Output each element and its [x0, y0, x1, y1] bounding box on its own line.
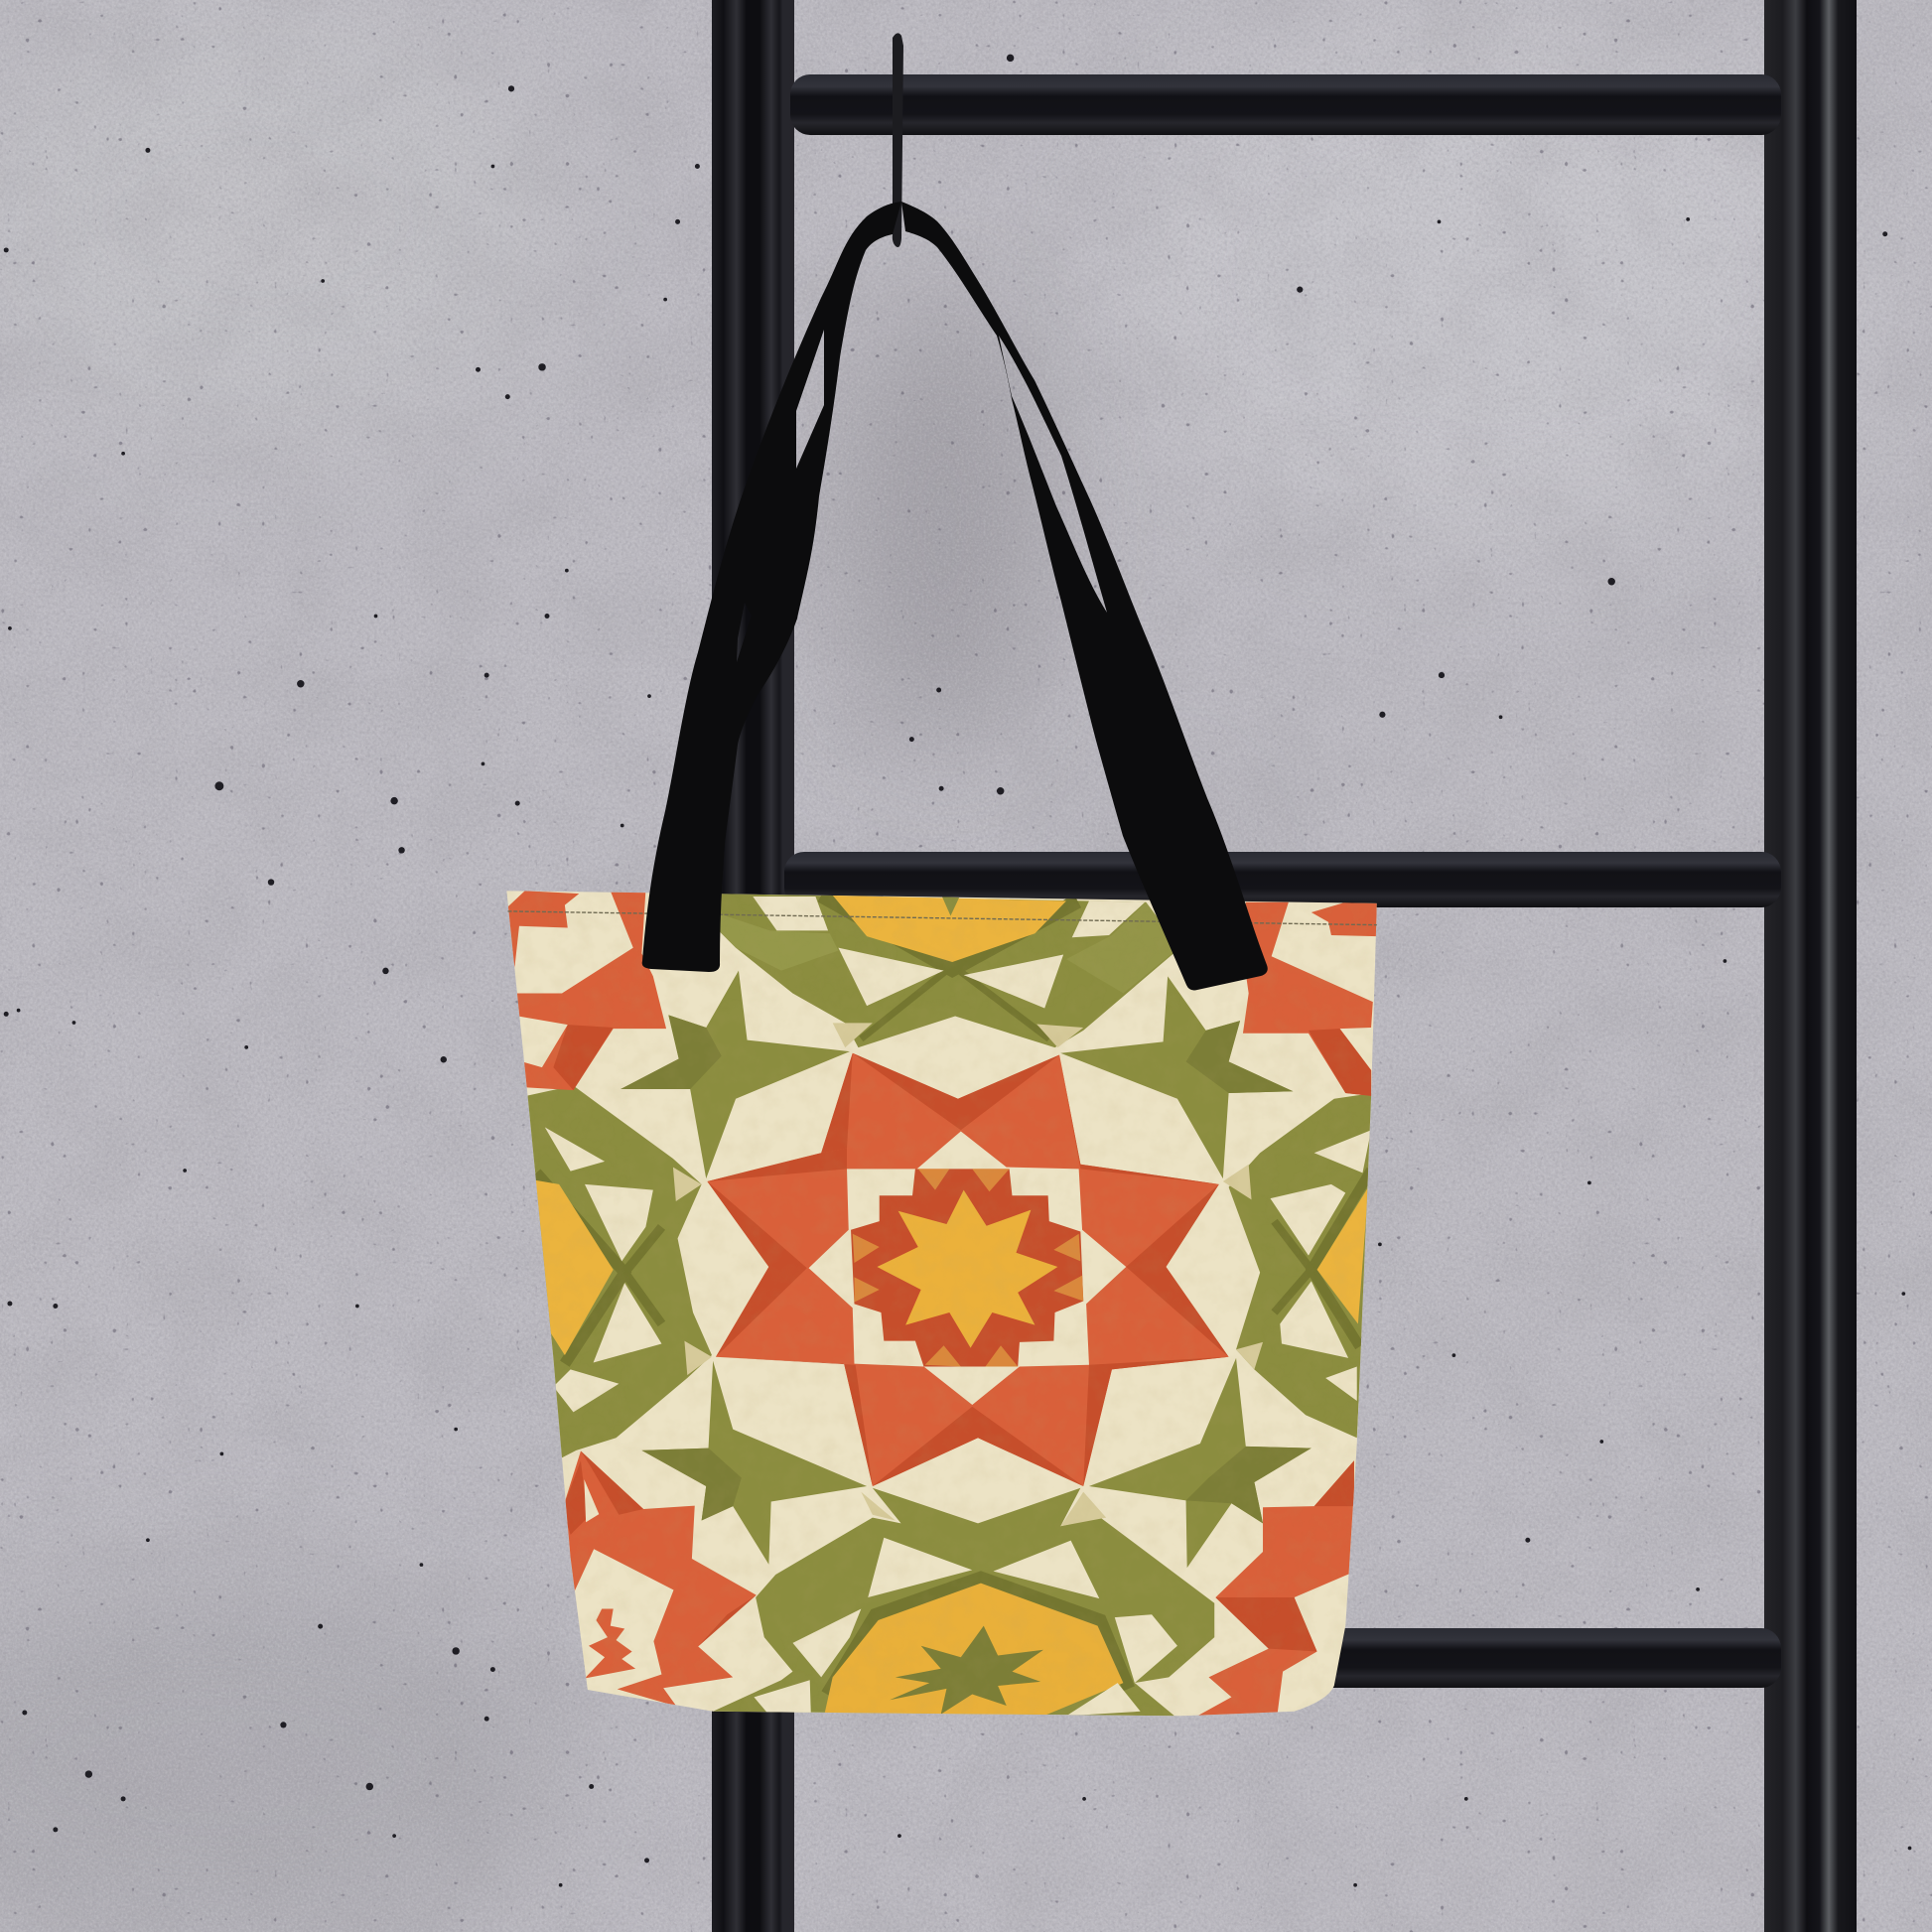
pattern: left olive band — [526, 1086, 712, 1460]
pattern: right olive band — [1223, 1093, 1373, 1438]
pattern: olive star bottom-left — [641, 1361, 867, 1565]
small olive star on yellow panel — [890, 1626, 1043, 1715]
pattern: orange corner top-left — [506, 891, 666, 1090]
small orange glyph — [585, 1608, 635, 1678]
pattern: top olive band — [719, 894, 1180, 1047]
left strap — [642, 202, 901, 972]
ladder rungs — [784, 74, 1781, 1688]
pattern: bottom olive band with yellow panel — [713, 1488, 1214, 1716]
icon: hook — [893, 33, 903, 247]
inner yellow star — [877, 1190, 1057, 1348]
top hem stitching — [507, 911, 1377, 925]
right ladder post — [1764, 0, 1857, 1932]
pattern: orange corner bottom-left — [563, 1450, 757, 1707]
centre cream octagon — [809, 1131, 1126, 1405]
right strap — [901, 202, 1268, 990]
centre: eight-point orange star — [707, 1053, 1229, 1486]
inner red stepped star — [851, 1169, 1083, 1367]
ladder — [712, 0, 1857, 1932]
tote bag body with geometric pattern — [496, 874, 1408, 1728]
pattern: orange corner top-right — [1243, 902, 1377, 1096]
pattern: olive star top-right — [1060, 976, 1293, 1178]
inner amber triangles — [853, 1169, 1083, 1367]
left ladder post — [712, 0, 794, 1932]
pattern: olive star top-left — [621, 971, 850, 1178]
paper texture overlay — [496, 874, 1408, 1728]
pattern: orange corner bottom-right — [1197, 1460, 1354, 1716]
tote straps — [642, 202, 1268, 990]
pattern: olive star bottom-right — [1089, 1358, 1311, 1568]
bag cream base — [496, 874, 1408, 1728]
